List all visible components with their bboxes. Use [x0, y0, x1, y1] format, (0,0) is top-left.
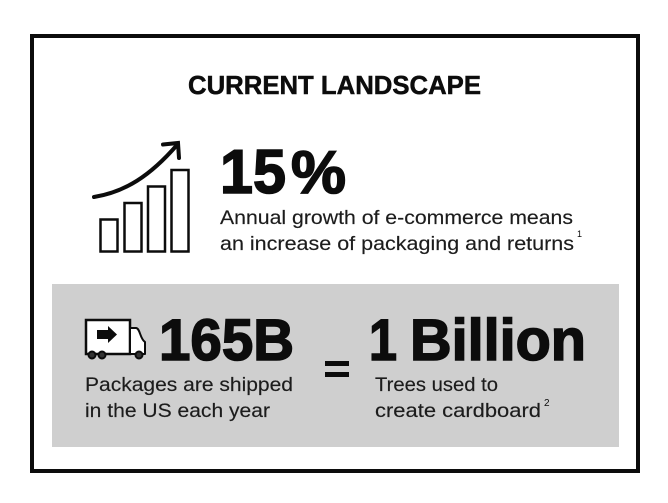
text block: e-commerce growth: 1 [577, 229, 582, 239]
stat: 165B: 165B [159, 308, 294, 373]
text block: trees used: 2 [544, 398, 550, 409]
text block: trees used: create cardboard [375, 400, 541, 422]
text block: packages shipped: in the US each year [85, 400, 271, 422]
text block: e-commerce growth: Annual growth of e-commerce means [220, 207, 573, 229]
text block: packages shipped: Packages are shipped [85, 374, 293, 396]
icon: growth bar chart with arrow [94, 143, 188, 252]
title: CURRENT LANDSCAPE [188, 70, 481, 100]
stat: 1 Billion: 1 [369, 308, 397, 373]
stat: 15% [220, 138, 346, 207]
panel: outer frame [32, 36, 638, 471]
equals sign [325, 361, 349, 377]
text block: trees used: Trees used to [375, 374, 498, 396]
stat: 15%: % [291, 139, 346, 206]
text block: e-commerce growth [220, 207, 582, 255]
text block: trees used [375, 374, 550, 422]
text block: e-commerce growth: an increase of packaging and returns [220, 233, 574, 255]
panel: grey comparison band [52, 284, 619, 447]
stat: 1 Billion: Billion [410, 308, 586, 373]
icon: delivery truck [86, 320, 145, 358]
stat: 15%: 15 [220, 138, 286, 207]
text block: packages shipped [85, 374, 293, 422]
